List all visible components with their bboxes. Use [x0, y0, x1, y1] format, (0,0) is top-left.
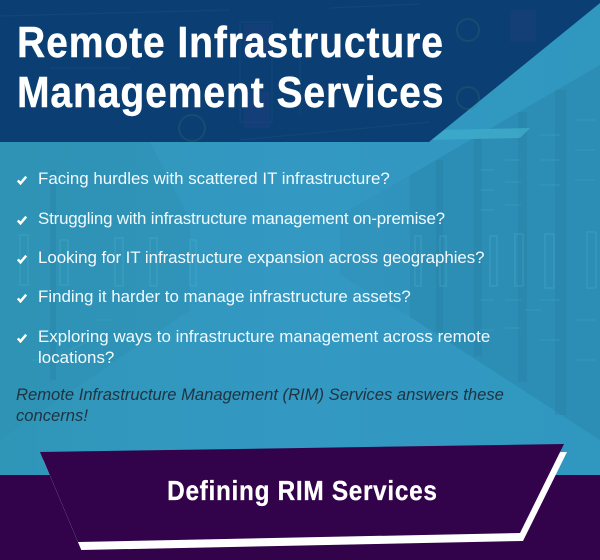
checklist item 4: Finding it harder to manage infrastructure assets?: [38, 287, 411, 306]
header panel: [0, 0, 600, 142]
title: Management Services: [17, 68, 444, 117]
checklist item 5: [17, 327, 490, 367]
banner shape: [40, 444, 564, 542]
ceiling light strip: [430, 128, 530, 140]
checklist item 5: locations?: [38, 348, 114, 367]
banner white offset shadow: [43, 452, 567, 550]
title: Remote Infrastructure: [17, 18, 444, 67]
purple footer band: [0, 475, 600, 560]
checklist item 1: Facing hurdles with scattered IT infrastructure?: [38, 169, 390, 188]
banner heading: Defining RIM Services: [167, 475, 438, 506]
checklist item 2: Struggling with infrastructure management on-premise?: [38, 209, 445, 228]
title: [17, 18, 444, 117]
checklist item 3: Looking for IT infrastructure expansion across geographies?: [38, 248, 484, 267]
checklist item 5: Exploring ways to infrastructure management across remote: [38, 327, 490, 346]
closing statement: Remote Infrastructure Management (RIM) Services answers these concerns!: [16, 385, 504, 425]
